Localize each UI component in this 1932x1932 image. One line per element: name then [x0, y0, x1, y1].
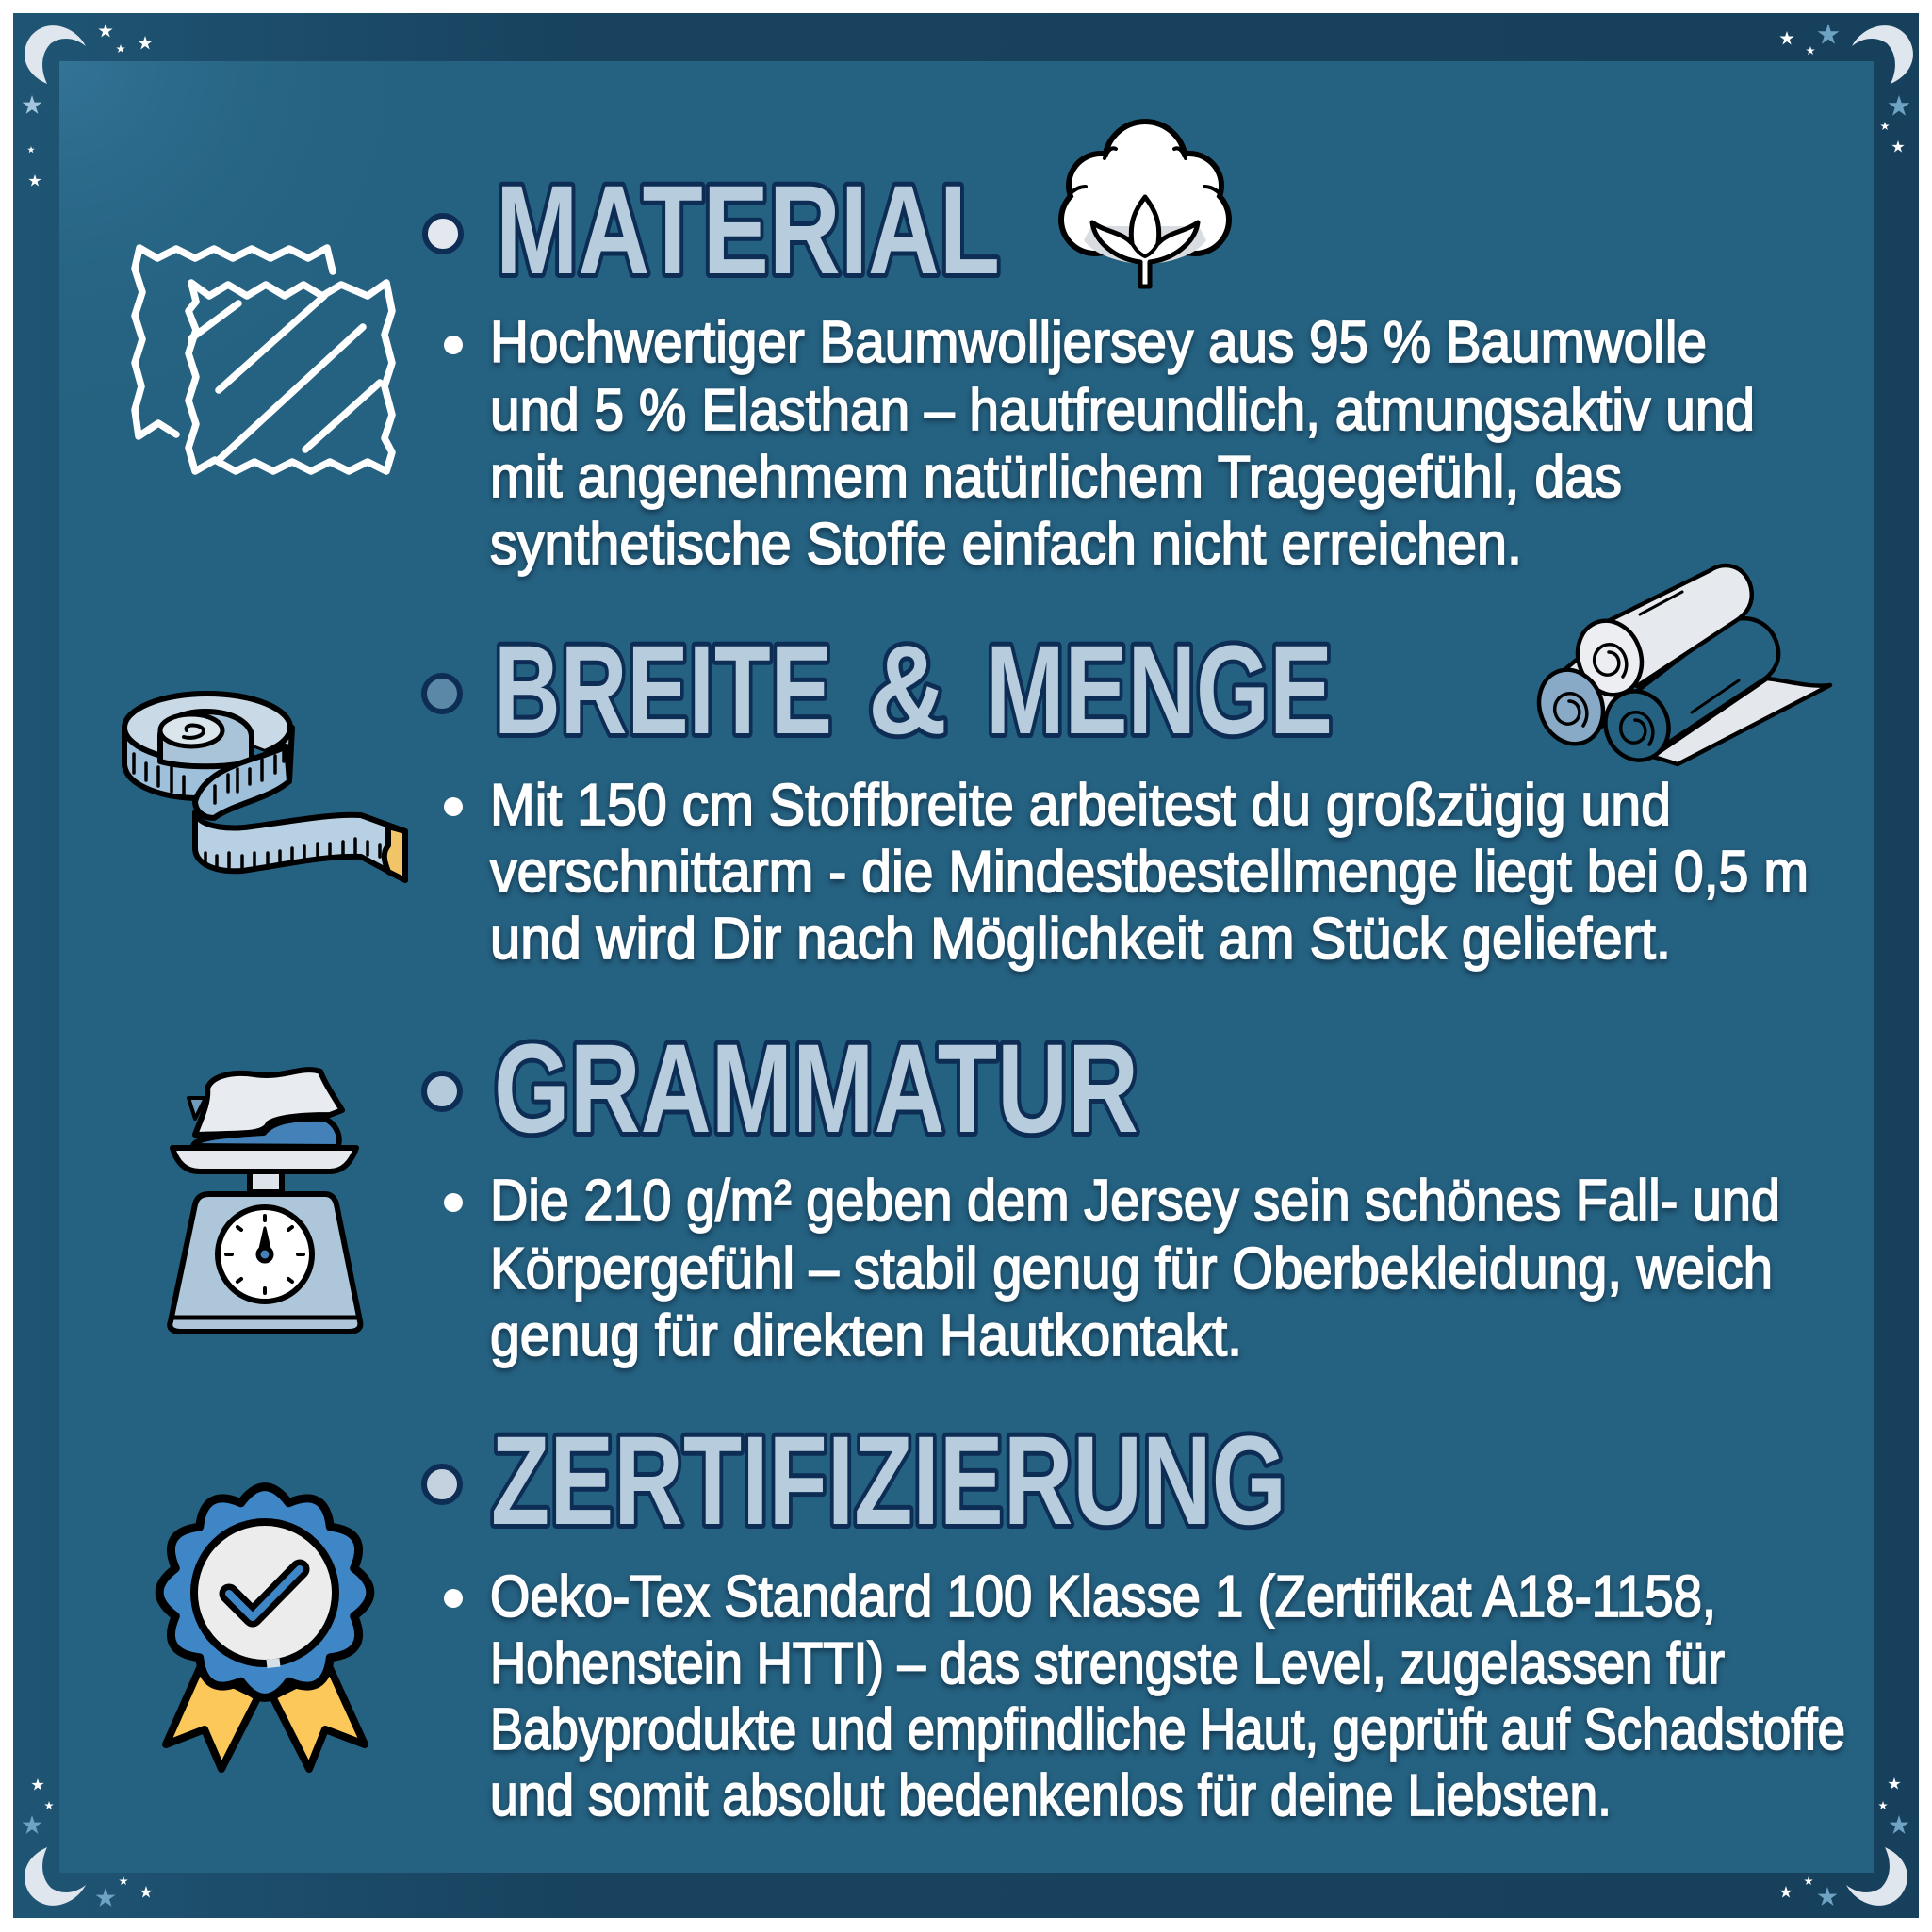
text block: material: und 5 % Elasthan – hautfreundlich, atmungsaktiv und [490, 378, 1755, 443]
icon: fabric rolls [1529, 565, 1830, 769]
text block: grammatur [490, 1169, 1780, 1368]
text block: material: mit angenehmem natürlichem Tragegefühl, das [490, 445, 1622, 510]
bullet: material heading [425, 216, 461, 252]
panel: material [135, 119, 1755, 577]
corner decoration: top left moon and stars [23, 24, 153, 187]
bullet: grammatur text [444, 1193, 463, 1212]
icon: fabric swatches [135, 248, 392, 471]
heading: ZERTIFIZIERUNG: ZERTIFIZIERUNG [491, 1411, 1286, 1551]
text block: grammatur: Die 210 g/m² geben dem Jersey sein schönes Fall- und [490, 1169, 1780, 1234]
panel: breite und menge [124, 565, 1830, 972]
bullet: zertifizierung heading [424, 1466, 460, 1502]
panel: grammatur [170, 1019, 1780, 1368]
heading: BREITE & MENGE: & [868, 620, 947, 761]
bullet: breite heading [424, 676, 460, 712]
panel: zertifizierung [159, 1411, 1845, 1828]
bullet: material text [444, 336, 463, 354]
text block: material: synthetische Stoffe einfach nicht erreichen. [490, 512, 1522, 577]
corner decoration: bottom left moon and stars [23, 1778, 153, 1907]
corner decoration: bottom right moon and stars [1779, 1777, 1908, 1906]
text block: breite und menge: Mit 150 cm Stoffbreite arbeitest du großzügig und [490, 773, 1671, 838]
bullet: zertifizierung text [444, 1589, 463, 1608]
text block: zertifizierung: und somit absolut bedenkenlos für deine Liebsten. [490, 1763, 1612, 1828]
text block: zertifizierung: Oeko-Tex Standard 100 Klasse 1 (Zertifikat A18-1158, [490, 1564, 1716, 1629]
heading: BREITE & MENGE: BREITE [494, 620, 832, 761]
icon: certification badge [159, 1487, 370, 1769]
text block: breite und menge: verschnittarm - die Mindestbestellmenge liegt bei 0,5 m [490, 840, 1809, 905]
text block: zertifizierung: Hohenstein HTTI) – das strengste Level, zugelassen für [490, 1631, 1725, 1696]
icon: kitchen scale with fabric [170, 1070, 360, 1332]
text block: material [490, 310, 1755, 577]
bullet: breite text [444, 797, 463, 816]
corner decoration: top right moon and stars [1779, 24, 1913, 153]
text block: breite und menge: und wird Dir nach Möglichkeit am Stück geliefert. [490, 907, 1671, 972]
bullet: grammatur heading [424, 1073, 460, 1109]
text block: breite und menge [490, 773, 1809, 972]
text block: grammatur: genug für direkten Hautkontakt. [490, 1303, 1242, 1368]
heading: BREITE & MENGE [494, 620, 1333, 761]
heading: GRAMMATUR: GRAMMATUR [494, 1019, 1138, 1159]
heading: MATERIAL: MATERIAL [496, 160, 1000, 301]
text block: grammatur: Körpergefühl – stabil genug für Oberbekleidung, weich [490, 1236, 1773, 1302]
icon: cotton boll [1058, 119, 1232, 287]
heading: BREITE & MENGE: MENGE [986, 620, 1333, 761]
icon: measuring tape [124, 694, 405, 880]
text block: material: Hochwertiger Baumwolljersey aus 95 % Baumwolle [490, 310, 1707, 375]
text block: zertifizierung [490, 1564, 1845, 1828]
